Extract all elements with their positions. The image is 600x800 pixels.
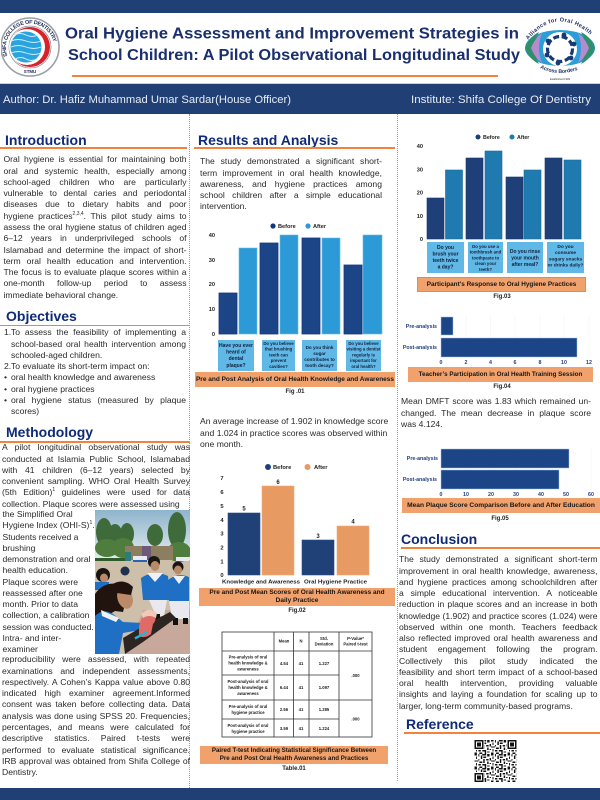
- table: paired t-test: Post-analysis of oral: [228, 679, 268, 684]
- table: paired t-test: Std.: [320, 636, 328, 641]
- y axis: 10: [209, 307, 215, 313]
- table: paired t-test: Pre-analysis of oral: [229, 654, 267, 660]
- text: introduction: 6–12 years in underprivileged schools of: [4, 233, 186, 243]
- table: paired t-test: .000: [351, 716, 360, 722]
- y axis: 3: [220, 532, 224, 538]
- figure label 01: Fig .01: [285, 389, 304, 395]
- bar chart: knowledge and awareness, Fig.01: Do you believe: [263, 341, 294, 346]
- text: methodology continued: percentages, and means were calculated for: [2, 722, 190, 732]
- bar chart: teacher participation, Fig.04: [403, 316, 592, 366]
- bar chart: oral hygiene practices, Fig.03: a day?: [438, 264, 453, 270]
- text: objectives list: oral hygiene practices: [11, 384, 95, 394]
- caption: Fig.04: Teacher’s Participation in Oral Health Training Session: [419, 371, 582, 378]
- x axis: 8: [539, 360, 542, 366]
- bar chart: knowledge and awareness, Fig.01: sugar: [313, 351, 326, 356]
- heading: Results and Analysis: Results and Analysis: [198, 132, 338, 148]
- text: methodology beside photo: the Simplified Oral: [2, 509, 73, 519]
- y axis: 0: [420, 237, 423, 243]
- text: methodology intro: convenient sampling. WHO Oral Health Survey: [2, 476, 190, 486]
- text: objectives list: schooled-aged children.: [11, 350, 102, 360]
- text: methodology continued: descriptive statistics. Paired t-tests were: [2, 733, 190, 743]
- value labels: 4: [351, 520, 355, 526]
- top navy band: [0, 0, 600, 13]
- caption: Table.01: [200, 746, 388, 764]
- text: average increase: one month.: [200, 439, 243, 449]
- table: paired t-test: Pre-analysis of oral: [229, 704, 267, 709]
- bar chart: knowledge and awareness, Fig.01: Do you think: [306, 345, 334, 350]
- caption: Fig.05: Mean Plaque Score Comparison Before and After Education: [407, 502, 595, 509]
- girl right: [172, 562, 184, 572]
- text: introduction: The focus is to evaluate plaque scores within a: [4, 267, 186, 277]
- text: methodology continued: respectively. A Cohen’s Kappa value above 0.80: [2, 677, 190, 687]
- bars after: [239, 235, 382, 334]
- x axis: [440, 492, 594, 498]
- text: methodology intro: (5th Edition)1 guidelines were used for data: [2, 487, 190, 497]
- bar chart: knowledge and awareness, Fig.01: regularly is: [352, 352, 376, 357]
- text: results summary: intervention.: [200, 201, 247, 211]
- text: conclusion: oral health intervention, providing valuable: [399, 678, 598, 688]
- table: paired t-test: health knowledge &: [228, 660, 268, 666]
- text: average increase: An average increase of 1.902 in knowledge score: [200, 416, 388, 426]
- table: paired t-test: Deviation: [315, 642, 334, 646]
- legend: [265, 464, 328, 471]
- legend: Before: [483, 135, 500, 141]
- logo: Shifa College of Dentistry: [1, 17, 60, 77]
- y axis: 30: [417, 168, 423, 174]
- category labels: [222, 579, 367, 585]
- bar chart: knowledge and awareness, Fig.01: contributes to: [304, 357, 335, 362]
- bars before: [427, 158, 562, 239]
- text: methodology continued: IRB approval was obtained from Shifa College of: [2, 756, 190, 766]
- table: paired t-test: 6.44: [280, 685, 289, 690]
- text: methodology beside photo: month. Prior to data: [2, 599, 78, 609]
- title underline: [72, 75, 498, 77]
- text: objectives list: 1.: [4, 327, 11, 337]
- text: objectives list: 2.: [4, 361, 11, 371]
- text: average increase: and 1.024 in practice scores was observed within: [200, 428, 387, 438]
- legend: After: [517, 135, 529, 141]
- text: objectives list: [4, 327, 186, 416]
- bar chart: knowledge and awareness, Fig.01: tooth decay?: [305, 363, 334, 368]
- y axis: 20: [209, 282, 215, 288]
- text: results summary: [200, 156, 382, 211]
- text: introduction: assess the oral hygiene status of children aged: [4, 222, 186, 232]
- text: DMFT score: Mean DMFT score was 1.83 which remained un-: [401, 396, 591, 406]
- text: conclusion: reduction in plaque scores and an increase in both: [399, 599, 598, 609]
- bar chart: oral hygiene practices, Fig.03: clean your: [475, 261, 497, 266]
- y axis: 6: [220, 490, 224, 496]
- table: paired t-test: .000: [351, 673, 360, 678]
- x axis: 6: [514, 360, 517, 366]
- girl middle: [148, 556, 160, 568]
- text: conclusion: student engagement following the program.: [399, 644, 598, 654]
- figure label 05: Fig.05: [491, 516, 509, 522]
- y axis: 2: [220, 546, 224, 552]
- text: methodology beside photo: reassessed after one: [2, 588, 83, 598]
- text: methodology beside photo: demonstration and oral: [2, 554, 90, 564]
- text: conclusion: knowledge (1.902) and practice scores (1.024) were: [399, 611, 598, 621]
- caption: Fig.02: Daily Practice: [276, 597, 318, 604]
- table: paired t-test: P-Value*: [347, 636, 364, 641]
- text: introduction: immediate behavioral change.: [4, 290, 118, 300]
- text: methodology intro: [2, 442, 190, 509]
- table: paired t-test: [222, 632, 372, 738]
- bar chart: oral hygiene practices, Fig.03: teeth?: [479, 267, 492, 272]
- table: paired t-test: 2.56: [280, 707, 289, 712]
- bar chart: knowledge and awareness, Fig.01: prevent: [271, 358, 287, 363]
- table label: Table.01: [282, 766, 306, 772]
- bars: [441, 449, 569, 489]
- legend: [476, 134, 529, 141]
- text: DMFT score: changed. The mean decrease in plaque score: [401, 408, 591, 418]
- bar chart: knowledge and awareness, Fig.01: visiting a dentist: [347, 347, 381, 352]
- text: methodology intro: with 41 children (6–12 years) selected by: [2, 465, 190, 475]
- y axis: 0: [220, 573, 224, 579]
- caption: Table.01: Pre and Post Oral Health Awareness and Practices: [220, 755, 368, 762]
- bar chart: oral hygiene practices, Fig.03: your mouth: [511, 256, 539, 262]
- text: objectives list: oral health knowledge and awareness: [11, 372, 155, 382]
- bar chart: knowledge and awareness, Fig.01: Have you ever: [219, 343, 253, 349]
- text: methodology intro: collection. Plaque scores were assessed using: [2, 499, 180, 509]
- text: methodology beside photo: brushing: [2, 543, 35, 553]
- bar chart: knowledge and awareness, Fig.01: plaque?: [226, 363, 246, 369]
- institute: Institute: Shifa College Of Dentistry: [411, 94, 592, 106]
- text: methodology intro: conducted at Islamia Public School, Islamabad: [2, 454, 190, 464]
- legend: Before: [278, 224, 296, 230]
- y axis: 40: [417, 144, 423, 150]
- bars: [441, 317, 577, 357]
- bar chart: oral hygiene practices, Fig.03: toothbrush and: [470, 250, 502, 255]
- text: introduction: term oral health education and intervention.: [4, 256, 186, 266]
- table: paired t-test: health knowledge &: [228, 685, 268, 690]
- text: methodology beside photo: Intra- and inter-: [2, 633, 61, 643]
- photo: school children with dental model: [95, 510, 190, 654]
- x axis: 4: [489, 360, 492, 366]
- text: results summary: awareness, and hygiene practices among: [200, 179, 382, 189]
- logo: Alliance for Oral Health Across Borders: Alliance for Oral Health: [526, 18, 592, 40]
- heading: Reference: Reference: [406, 716, 474, 732]
- x axis: 10: [561, 360, 567, 366]
- text: introduction: [4, 154, 187, 300]
- text: methodology beside photo: Plaque scores were: [2, 577, 78, 587]
- caption: Fig.01: Pre and Post Analysis of Oral Health Knowledge and Awareness: [196, 376, 394, 383]
- bars after: [446, 151, 581, 239]
- table: paired t-test: hygiene practice: [231, 710, 265, 715]
- text: conclusion: observed within one month. Teachers feedback: [399, 622, 598, 632]
- legend: [270, 223, 327, 230]
- text: objectives list: •: [4, 395, 7, 405]
- bar chart: knowledge and awareness, Fig.01: that brushing: [265, 347, 293, 352]
- value labels: 3: [316, 534, 320, 540]
- y axis: 7: [220, 476, 224, 482]
- text: objectives list: scores): [11, 406, 39, 416]
- logo: Alliance for Oral Health Across Borders: [525, 18, 595, 81]
- bar chart: knowledge and awareness, Fig.01: dental: [229, 356, 244, 362]
- text: conclusion: larger, long-term community-based programs.: [399, 701, 573, 711]
- table: paired t-test: Paired t-test: [343, 642, 368, 646]
- title: School Children: A Pilot Observational Longitudinal Study: [68, 47, 520, 64]
- category labels: [403, 324, 437, 351]
- title: Oral Hygiene Assessment and Improvement Strategies in: [65, 26, 519, 42]
- heading: Objectives: Objectives: [6, 308, 77, 324]
- text: introduction: Islamabad and determine the impact of short-: [4, 245, 186, 255]
- y axis: 1: [220, 560, 224, 566]
- figure label 04: Fig.04: [493, 384, 511, 390]
- caption: Fig.02: Pre and Post Mean Scores of Oral Health Awareness and: [209, 589, 385, 596]
- text: methodology beside photo: [2, 509, 95, 654]
- dental model and desk: [123, 612, 176, 654]
- x axis: [440, 360, 592, 366]
- value labels: 5: [242, 506, 246, 512]
- y axis: [220, 476, 224, 579]
- text: results summary: The study demonstrated a significant short-: [200, 156, 382, 166]
- category labels: Pre-analysis: [406, 324, 437, 330]
- category labels: [403, 456, 438, 483]
- caption: Table.01: Paired T-test Indicating Statistical Significance Between: [212, 747, 376, 754]
- table: paired t-test: awareness: [237, 666, 259, 672]
- category labels: Knowledge and Awareness: [222, 579, 300, 585]
- text: objectives list: •: [4, 384, 7, 394]
- text: conclusion: The study demonstrated a significant short-term: [399, 554, 598, 564]
- caption: Fig.03: [417, 277, 586, 292]
- y axis: 0: [212, 332, 215, 338]
- text: methodology continued: [2, 654, 190, 777]
- y axis: 30: [209, 258, 215, 264]
- category labels: [427, 242, 584, 273]
- table: paired t-test: 1.097: [319, 685, 330, 690]
- bar chart: knowledge and awareness, Fig.01: oral health?: [351, 364, 376, 369]
- caption: Fig.04: [408, 367, 593, 382]
- text: introduction: school-aged children who are particularly: [4, 177, 186, 187]
- bar chart: knowledge and awareness, Fig.01: important for: [350, 358, 377, 363]
- x axis: 0: [440, 360, 443, 366]
- text: methodology beside photo: health education.: [2, 565, 68, 575]
- bar chart: mean scores, Fig.02: [220, 464, 370, 585]
- logo: Alliance for Oral Health Across Borders: Established 1999: [550, 77, 571, 81]
- text: conclusion: [399, 554, 598, 711]
- bar chart: oral hygiene practices, Fig.03: Do you: [557, 244, 574, 250]
- girl foreground: [95, 584, 128, 622]
- bars before: [219, 238, 362, 334]
- text: introduction: vulnerable to dental caries and periodontal: [4, 188, 186, 198]
- table: paired t-test: awareness: [237, 691, 259, 696]
- bar chart: oral hygiene practices, Fig.03: after meal?: [512, 262, 538, 268]
- bar chart: oral hygiene practices, Fig.03: sugary snacks: [549, 256, 582, 262]
- author and institute band: [0, 83, 600, 114]
- bar chart: knowledge and awareness, Fig.01: [208, 223, 382, 371]
- y axis: [209, 233, 215, 338]
- bar chart: oral hygiene practices, Fig.03: toothpaste to: [472, 255, 499, 260]
- text: conclusion: and hygiene practices among schoolchildren after: [399, 577, 598, 587]
- caption: Fig.03: Participant's Response to Oral Hygiene Practices: [427, 281, 576, 288]
- table: paired t-test: 4.54: [280, 661, 289, 666]
- text: average increase: [200, 416, 388, 449]
- table: paired t-test: N: [299, 638, 303, 644]
- value labels: 6: [276, 480, 280, 486]
- bar chart: plaque score, Fig.05: [403, 448, 594, 497]
- legend: After: [313, 224, 327, 230]
- bar chart: knowledge and awareness, Fig.01: Do you believe: [348, 341, 379, 346]
- bar chart: knowledge and awareness, Fig.01: heard of: [226, 350, 246, 356]
- bar chart: oral hygiene practices, Fig.03: Do you use a: [472, 244, 499, 249]
- bar chart: knowledge and awareness, Fig.01: cavities?: [269, 364, 288, 369]
- text: introduction: oral and systemic health, especially among: [4, 166, 186, 176]
- text: conclusion: improvement in oral health knowledge, awareness,: [399, 566, 598, 576]
- text: results summary: school children after a simple educational: [200, 190, 382, 200]
- y axis: [417, 144, 423, 243]
- table: paired t-test: 3.59: [280, 726, 289, 731]
- table: paired t-test: 1.224: [319, 726, 330, 731]
- y axis: 5: [220, 504, 224, 510]
- bar chart: oral hygiene practices, Fig.03: teeth twice: [433, 258, 459, 264]
- table: paired t-test: hygiene practice: [231, 729, 265, 734]
- y axis: 10: [417, 214, 423, 220]
- bar chart: oral hygiene practices, Fig.03: [416, 134, 584, 273]
- table: paired t-test: 1.227: [319, 661, 330, 666]
- text: methodology beside photo: examiner: [2, 644, 38, 654]
- text: methodology beside photo: Students received a: [2, 532, 78, 542]
- bar chart: oral hygiene practices, Fig.03: consume: [555, 251, 576, 256]
- y axis: 20: [417, 190, 423, 196]
- category labels: Oral Hygiene Practice: [304, 579, 367, 585]
- logo: Shifa College of Dentistry: SHIFA COLLEGE OF DENTISTRY: [2, 20, 57, 57]
- text: objectives list: To evaluate its short-term impact on:: [11, 361, 150, 371]
- text: methodology continued: analysis was done using SPSS 20. Frequencies,: [2, 711, 190, 721]
- text: methodology beside photo: session was conducted.: [2, 622, 94, 632]
- table: paired t-test: 41: [299, 661, 304, 666]
- table: paired t-test: 1.285: [319, 707, 330, 712]
- text: methodology continued: consent was taken before collecting data. Data: [2, 699, 190, 709]
- bar chart: knowledge and awareness, Fig.01: teeth can: [269, 352, 288, 357]
- text: introduction: hygiene practices2,3,4. This pilot study aims to: [4, 211, 186, 221]
- text: objectives list: oral hygiene status (measured by plaque: [11, 395, 186, 405]
- legend: After: [314, 465, 328, 471]
- text: introduction: diseases due to dietary habits and poor: [4, 199, 186, 209]
- text: results summary: term improvement in oral health knowledge,: [200, 168, 382, 178]
- heading: Methodology: Methodology: [6, 424, 93, 440]
- bottom navy band: [0, 788, 600, 800]
- table: paired t-test: Mean: [279, 638, 290, 644]
- bar chart: oral hygiene practices, Fig.03: Do you rinse: [510, 249, 540, 255]
- x axis: 12: [586, 360, 592, 366]
- table: paired t-test: Post-analysis of oral: [228, 723, 268, 728]
- text: objectives list: school-based oral health intervention among: [11, 339, 186, 349]
- caption: Fig.02: [199, 588, 395, 606]
- logo: Alliance for Oral Health Across Borders: Across Borders: [540, 65, 578, 73]
- y axis: 4: [220, 518, 224, 524]
- caption: Fig.05: [402, 498, 600, 513]
- text: methodology intro: A pilot longitudinal observational study was: [2, 442, 190, 452]
- text: objectives list: To assess the feasibility of implementing a: [11, 327, 186, 337]
- text: methodology continued: reproducibility were assessed, with repeated: [2, 654, 190, 664]
- QR code: [474, 740, 516, 782]
- y axis: 40: [209, 233, 215, 239]
- text: methodology continued: examinations and independent assessments,: [2, 666, 190, 676]
- table: paired t-test: 41: [299, 707, 304, 712]
- text: DMFT score: was 4.124.: [401, 419, 443, 429]
- text: conclusion: also reflected improved oral health awareness and: [399, 633, 598, 643]
- text: conclusion: Collectively this pilot study indicated the: [399, 656, 598, 666]
- category labels: Post-analysis: [403, 477, 437, 483]
- logo: Shifa College of Dentistry: STMU: [24, 69, 36, 74]
- text: conclusion: a simple educational intervention. A noticeable: [399, 588, 598, 598]
- table: paired t-test: 41: [299, 685, 304, 690]
- text: introduction: one-month follow-up period to assess: [4, 278, 186, 288]
- title: [65, 26, 520, 64]
- text: DMFT score: [401, 396, 591, 429]
- category labels: Post-analysis: [403, 345, 437, 351]
- figure label 03: Fig.03: [493, 294, 511, 300]
- bars: [228, 513, 334, 575]
- heading: Conclusion: Conclusion: [401, 531, 477, 547]
- heading: Introduction: Introduction: [5, 132, 87, 148]
- category labels: [218, 340, 381, 371]
- text: introduction: Oral hygiene is essential for maintaining both: [4, 154, 186, 164]
- author: Author: Dr. Hafiz Muhammad Umar Sardar(House Officer): [3, 94, 291, 106]
- x axis: 2: [465, 360, 468, 366]
- boy left background: [96, 568, 110, 582]
- value labels: [242, 480, 355, 540]
- table: paired t-test: 41: [299, 726, 304, 731]
- bar chart: oral hygiene practices, Fig.03: Do you: [437, 245, 454, 251]
- bar chart: oral hygiene practices, Fig.03: brush your: [432, 252, 459, 258]
- text: objectives list: •: [4, 372, 7, 382]
- text: conclusion: insights and laying a foundation for scaling up to: [399, 689, 598, 699]
- bar chart: oral hygiene practices, Fig.03: or drinks daily?: [548, 263, 583, 269]
- text: methodology continued: performed to evaluate statistical significance.: [2, 745, 190, 755]
- text: conclusion: feasibility and short term impact of a school-based: [399, 667, 598, 677]
- text: methodology continued: indicated high examiner agreement.Informed: [2, 688, 190, 698]
- text: methodology continued: Dentistry.: [2, 767, 38, 777]
- text: methodology beside photo: Hygiene Index (OHI-S)1.: [2, 520, 95, 530]
- caption: Fig.01: [195, 372, 395, 387]
- legend: Before: [273, 465, 292, 471]
- text: methodology beside photo: collection, a calibration: [2, 610, 89, 620]
- figure label 02: Fig.02: [288, 608, 306, 614]
- category labels: Pre-analysis: [407, 456, 438, 462]
